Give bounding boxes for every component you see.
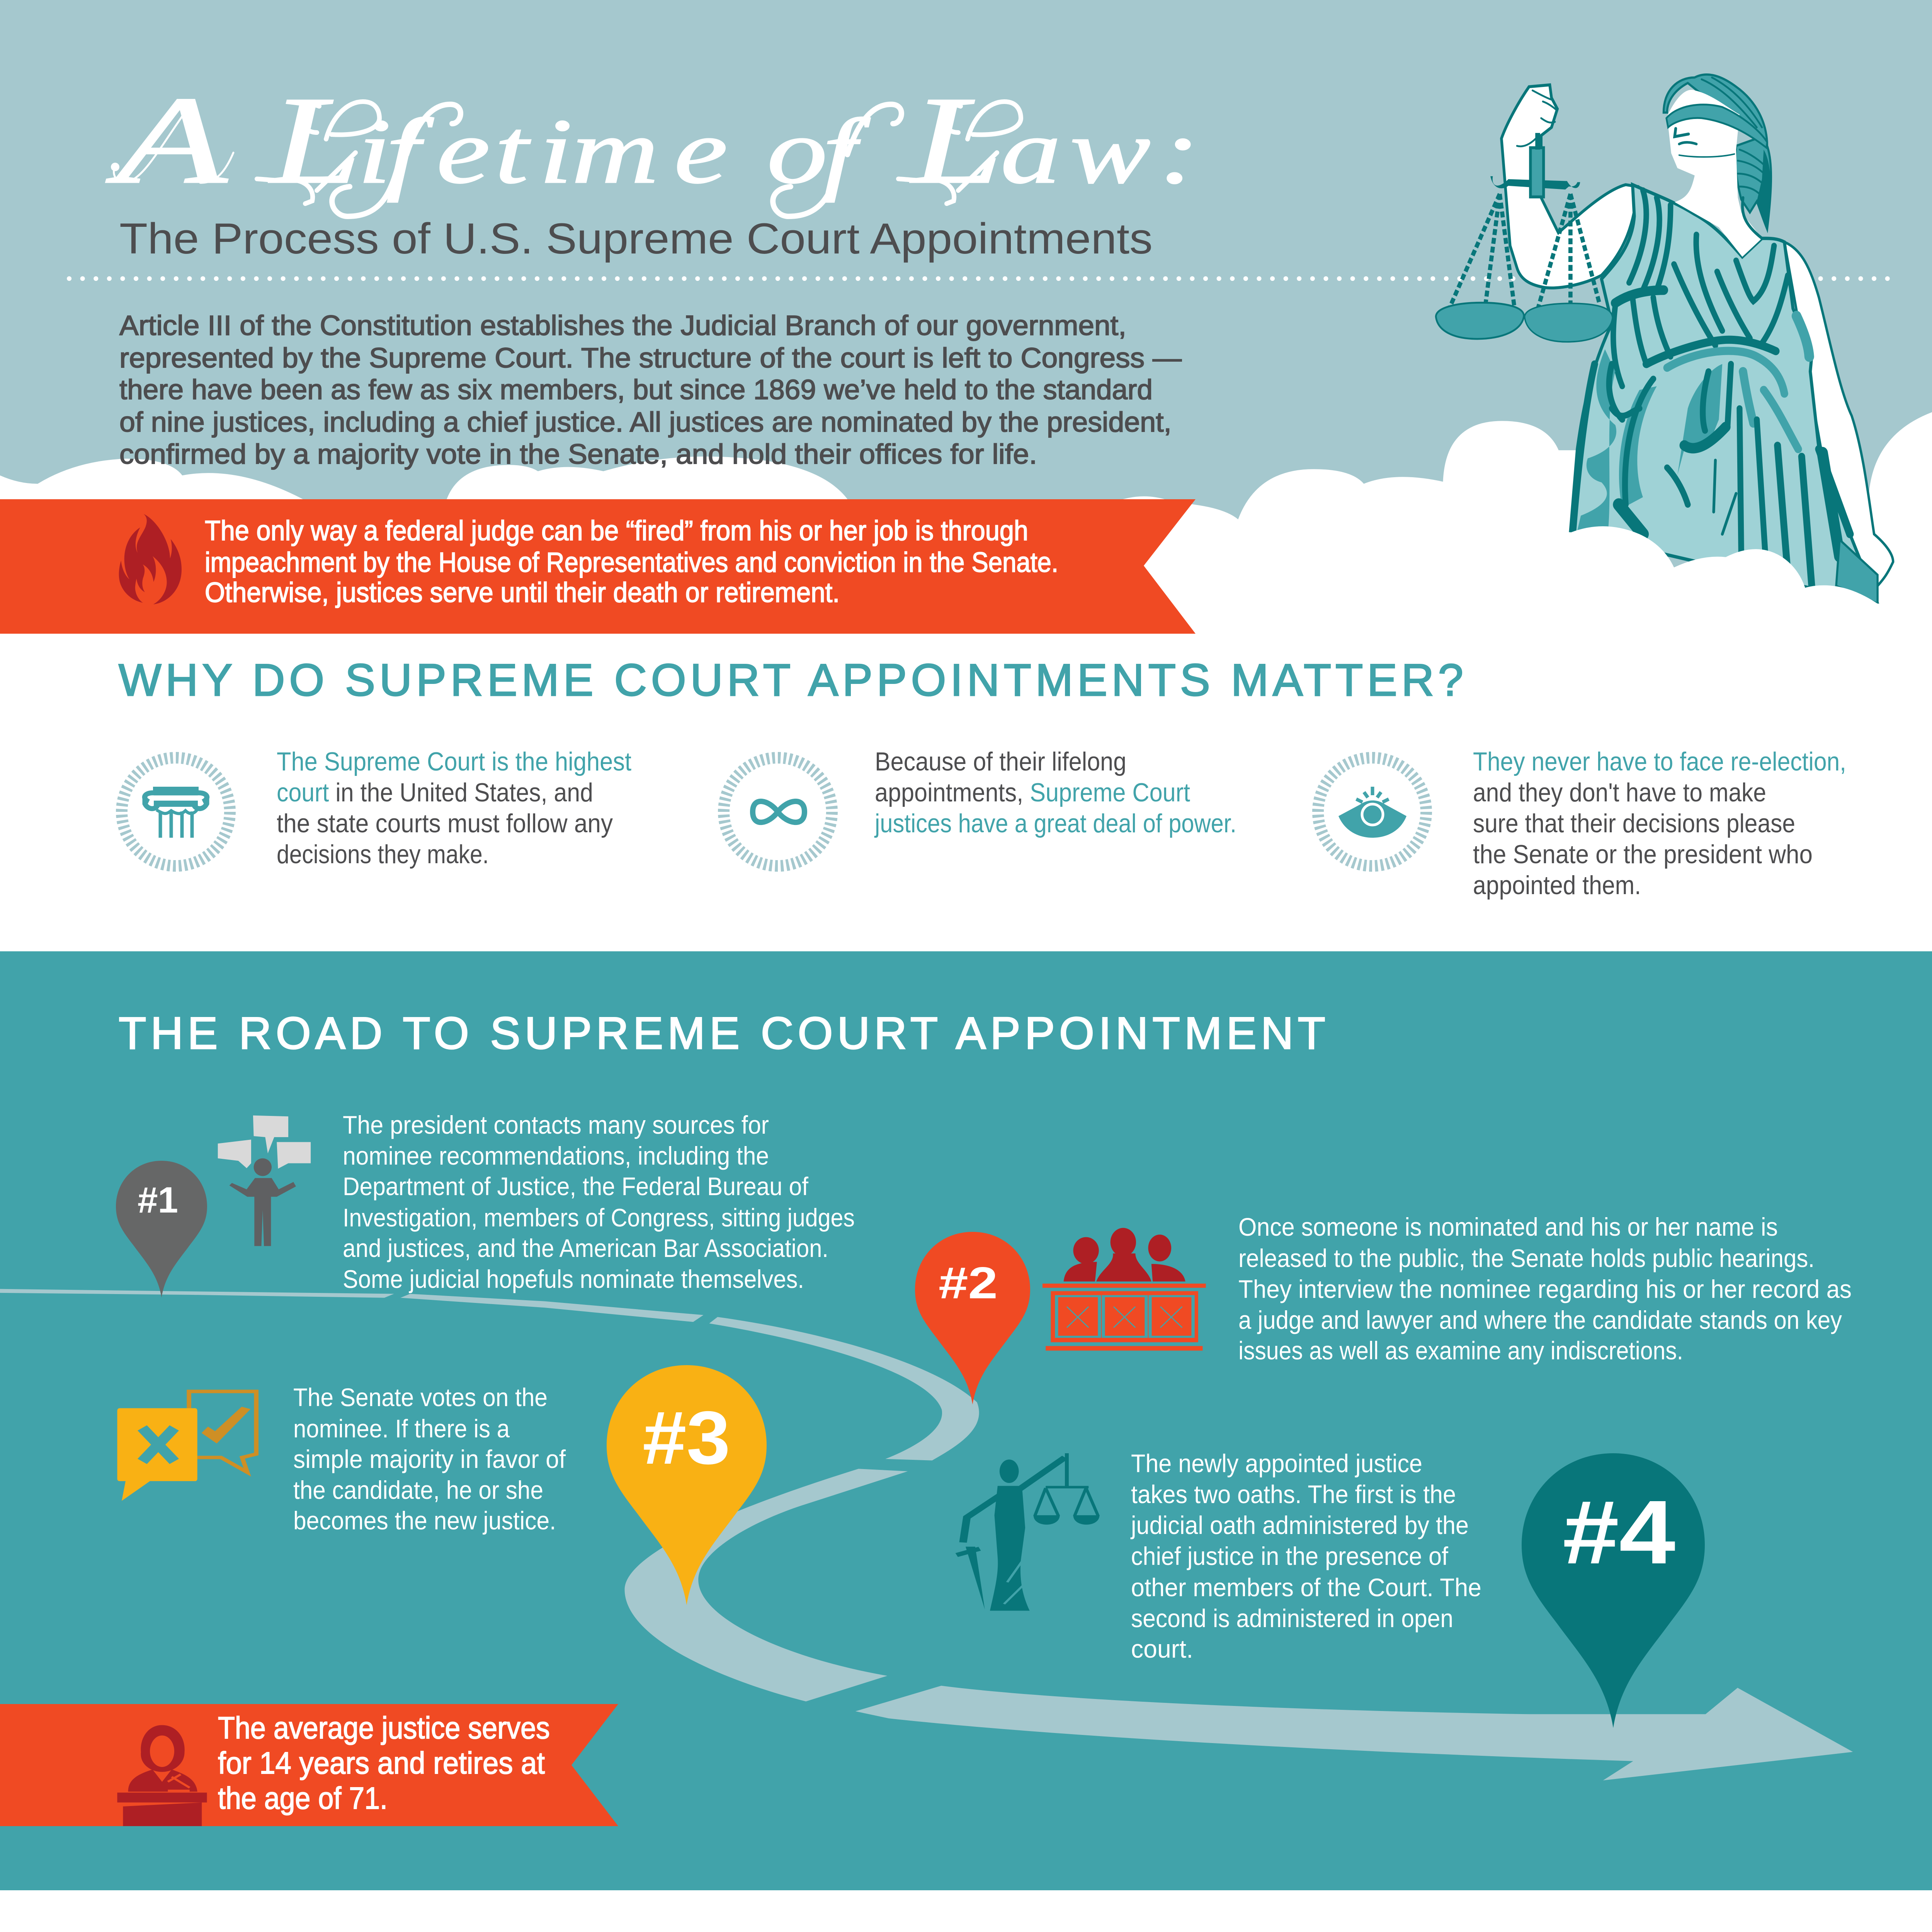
- banner text: impeachment by the House of Representatives and conviction in the Senate.: [205, 547, 1058, 578]
- banner text: average justice: the age of 71.: [218, 1781, 388, 1815]
- blindfold: [1667, 105, 1767, 148]
- step 4 text: judicial oath administered by the: [1130, 1511, 1469, 1539]
- banner text: average justice: The average justice serves: [218, 1711, 550, 1745]
- back clouds: [0, 412, 1932, 633]
- step 1 text: and justices, and the American Bar Association.: [343, 1234, 828, 1262]
- title: f: [823, 100, 872, 203]
- icon: judge: [117, 1725, 207, 1826]
- step 2 text: issues as well as examine any indiscretions.: [1238, 1336, 1683, 1365]
- step 4 text: The newly appointed justice: [1131, 1449, 1422, 1478]
- dress folds: [1573, 190, 1788, 531]
- decorative flourishes: [111, 102, 1021, 216]
- column 3: re-election: the Senate or the president who: [1473, 840, 1813, 869]
- intro paragraph: [119, 310, 1182, 470]
- step 2 text: They interview the nominee regarding his or her record as: [1238, 1275, 1852, 1303]
- scale beam: [1490, 176, 1580, 189]
- pin #3: [607, 1365, 767, 1605]
- intro paragraph: of nine justices, including a chief justice. All justices are nominated by the president,: [119, 407, 1172, 438]
- step 2 text: Once someone is nominated and his or her name is: [1238, 1213, 1778, 1241]
- pin #1: #1: [138, 1180, 178, 1221]
- column 2: lifelong: appointments, Supreme Court: [875, 778, 1190, 807]
- column 3: re-election: and they don't have to make: [1473, 778, 1766, 807]
- icon: vote bubbles: [117, 1391, 256, 1501]
- icon: justice statue: [957, 1453, 1099, 1611]
- title: A: [105, 70, 230, 210]
- hair: [1663, 75, 1771, 229]
- title: f: [386, 100, 435, 203]
- column 2: lifelong: Because of their lifelong: [875, 747, 1126, 776]
- step 4 text: other members of the Court. The: [1131, 1573, 1481, 1602]
- icon: lady justice figure: [1436, 75, 1893, 604]
- hair strands: [1702, 77, 1769, 238]
- pin #4: #4: [1563, 1481, 1675, 1583]
- step 1 text: Investigation, members of Congress, sitting judges: [343, 1203, 855, 1232]
- title: e: [437, 100, 490, 203]
- chains: [1446, 194, 1600, 320]
- step 3 text: the candidate, he or she: [293, 1476, 543, 1504]
- title: o: [767, 100, 827, 203]
- banner text: Otherwise, justices serve until their death or retirement.: [205, 577, 840, 608]
- step 4 text: takes two oaths. The first is the: [1131, 1480, 1456, 1509]
- subtitle: The Process of U.S. Supreme Court Appointments: [119, 214, 1153, 263]
- pin #2: #2: [939, 1258, 998, 1308]
- column 3: re-election: appointed them.: [1473, 871, 1641, 900]
- raised arm: [1502, 85, 1638, 288]
- title: t: [495, 100, 532, 203]
- intro paragraph: Article III of the Constitution establishes the Judicial Branch of our government,: [119, 310, 1126, 341]
- step 3 text: simple majority in favor of: [293, 1445, 566, 1473]
- face and neck: [1667, 90, 1762, 257]
- title: :: [1159, 100, 1199, 203]
- icon: balanced figure: [1318, 758, 1426, 866]
- step 2 text: [1238, 1213, 1852, 1365]
- heading: road: THE ROAD TO SUPREME COURT APPOINTMENT: [119, 1008, 1325, 1058]
- pans: [1436, 303, 1524, 339]
- column 1: highest court: [122, 747, 631, 869]
- step 4 text: second is administered in open: [1131, 1604, 1453, 1633]
- pin #3: #3: [643, 1396, 730, 1480]
- road path: [0, 1289, 1853, 1781]
- step 3 text: becomes the new justice.: [293, 1506, 556, 1535]
- step 1 text: The president contacts many sources for: [343, 1111, 769, 1139]
- title: [105, 70, 1199, 216]
- step 4 text: chief justice in the presence of: [1131, 1542, 1449, 1570]
- step 3 text: [293, 1383, 566, 1535]
- step 3 text: The Senate votes on the: [293, 1383, 548, 1412]
- title: L: [268, 70, 361, 210]
- hair back: [1757, 150, 1771, 229]
- column 2: lifelong: [724, 747, 1236, 866]
- banner text: average justice: [218, 1711, 550, 1815]
- title: a: [1001, 100, 1061, 203]
- pin #1: [116, 1161, 207, 1298]
- pin #4: [1522, 1453, 1705, 1728]
- icon: infinity: [724, 758, 832, 866]
- title: L: [909, 70, 1003, 210]
- step 3 text: nominee. If there is a: [293, 1414, 510, 1443]
- step 1 text: [343, 1111, 855, 1293]
- icon: senate panel: [1043, 1228, 1206, 1350]
- banner text: [205, 515, 1058, 608]
- lower folds: [1609, 364, 1850, 590]
- title: e: [674, 100, 758, 203]
- column 3: re-election: They never have to face re-election,: [1473, 747, 1846, 776]
- right arm: [1784, 242, 1893, 590]
- pin #2: [915, 1232, 1030, 1405]
- step 1 text: Department of Justice, the Federal Bureau of: [343, 1172, 809, 1201]
- title: w: [1070, 100, 1151, 203]
- step 4 text: [1130, 1449, 1481, 1663]
- step 2 text: released to the public, the Senate holds public hearings.: [1238, 1244, 1815, 1272]
- column 2: lifelong: justices have a great deal of power.: [874, 809, 1236, 838]
- banner: fired: [0, 499, 1196, 634]
- column 1: highest court: the state courts must follow any: [277, 809, 613, 838]
- banner: average justice: [0, 1704, 618, 1826]
- arrow: [855, 1686, 1853, 1781]
- intro paragraph: confirmed by a majority vote in the Senate, and hold their offices for life.: [119, 439, 1037, 470]
- intro paragraph: represented by the Supreme Court. The structure of the court is left to Congress —: [119, 343, 1182, 374]
- face details: [1517, 90, 1735, 157]
- icon: flame: [119, 514, 182, 604]
- title: m: [571, 100, 659, 203]
- book: [1836, 540, 1878, 604]
- panel: road: [0, 951, 1932, 1890]
- step 4 text: court.: [1131, 1634, 1193, 1663]
- icon: person with speech bubbles: [218, 1116, 311, 1246]
- panel: header background: [0, 0, 1932, 634]
- banner text: The only way a federal judge can be “fired” from his or her job is through: [205, 515, 1028, 546]
- intro paragraph: there have been as few as six members, but since 1869 we’ve held to the standard: [119, 374, 1153, 405]
- step 1 text: nominee recommendations, including the: [343, 1141, 769, 1170]
- column 1: highest court: court in the United States, and: [277, 778, 593, 807]
- title: i: [539, 100, 573, 203]
- front cloud: [1121, 519, 1932, 634]
- column 3: re-election: [1318, 747, 1846, 900]
- column 1: highest court: The Supreme Court is the highest: [277, 747, 631, 776]
- title: i: [358, 100, 391, 203]
- banner text: average justice: for 14 years and retires at: [218, 1746, 545, 1780]
- dotted divider: [69, 276, 1892, 281]
- heading: why: WHY DO SUPREME COURT APPOINTMENTS MATTER?: [119, 655, 1463, 705]
- belt and mid drape: [1667, 316, 1809, 449]
- column 3: re-election: sure that their decisions please: [1473, 809, 1795, 838]
- column 1: highest court: decisions they make.: [277, 840, 489, 869]
- step 1 text: Some judicial hopefuls nominate themselves.: [343, 1265, 804, 1293]
- step 2 text: a judge and lawyer and where the candidate stands on key: [1238, 1306, 1842, 1334]
- dress: [1570, 185, 1878, 604]
- icon: column: [122, 758, 230, 866]
